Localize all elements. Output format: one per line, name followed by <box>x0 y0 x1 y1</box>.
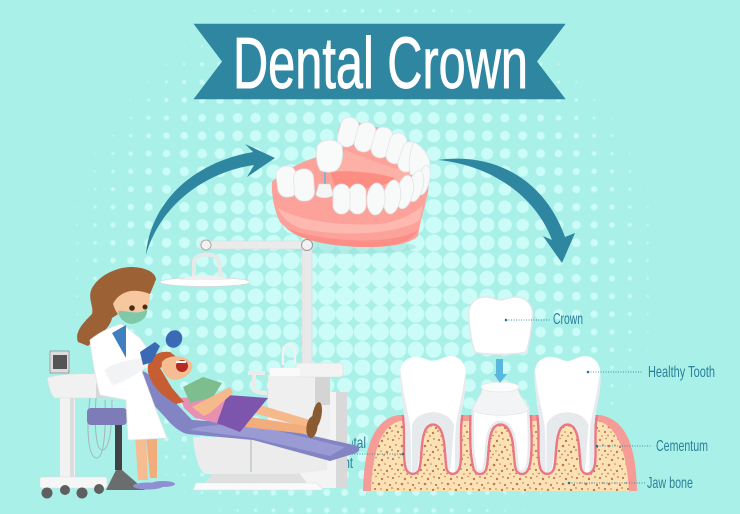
gum bottom shade <box>286 228 418 247</box>
surgical mask <box>118 309 147 324</box>
face <box>162 356 192 380</box>
gum around roots <box>402 415 598 476</box>
label: cementum: Cementum <box>656 438 708 455</box>
scrubs <box>112 325 126 358</box>
blouse <box>180 395 227 423</box>
label: periodontal ligament (partly behind chair): ligament <box>311 455 353 472</box>
front teeth <box>333 164 432 216</box>
faucet <box>283 344 295 365</box>
prepared middle tooth <box>471 382 530 473</box>
hair <box>148 352 184 404</box>
chair base <box>193 437 327 474</box>
gum base <box>272 122 429 247</box>
wheels <box>42 484 104 498</box>
tray table <box>40 351 116 498</box>
label: jaw bone: Jaw bone <box>647 475 693 492</box>
legs <box>250 403 310 428</box>
label: periodontal ligament (partly behind chair) <box>347 436 366 468</box>
cabinet <box>300 392 347 488</box>
skirt <box>217 395 268 432</box>
lamp <box>194 254 221 280</box>
monitor <box>50 351 69 373</box>
label: crown: Crown <box>553 311 583 328</box>
lower gum highlight <box>278 205 423 234</box>
stump and small crown <box>316 140 343 198</box>
gloves <box>140 327 185 365</box>
legs <box>135 435 148 480</box>
gum <box>363 415 637 491</box>
eyes <box>129 304 148 311</box>
shoes <box>133 481 175 490</box>
shoes <box>305 401 324 439</box>
mouth <box>176 360 188 372</box>
tooth diagram <box>363 297 637 491</box>
left molars <box>275 165 315 202</box>
hoses <box>88 398 112 458</box>
patient in chair <box>132 352 359 461</box>
arrow: patient to jaw <box>146 144 275 255</box>
title: Dental Crown <box>233 24 528 104</box>
green bib <box>183 377 222 403</box>
labels and leader lines <box>345 311 715 492</box>
base <box>40 477 107 488</box>
right healthy tooth <box>534 356 601 476</box>
lamp arm <box>302 245 312 367</box>
jaw bone <box>371 421 629 491</box>
placement arrow <box>494 359 507 383</box>
left healthy tooth <box>400 356 466 476</box>
chair <box>132 371 359 461</box>
sleeve <box>104 358 148 385</box>
stool <box>87 408 145 490</box>
back teeth <box>335 115 430 176</box>
label: periodontal ligament (partly behind chair): Periodontal <box>306 435 366 452</box>
table top <box>47 374 113 398</box>
arrow: jaw to tooth diagram <box>438 159 575 263</box>
jaw model <box>272 115 432 254</box>
post <box>60 397 75 477</box>
dental unit and lamp <box>160 240 347 490</box>
coat <box>90 324 167 440</box>
hair <box>77 267 156 346</box>
face <box>112 289 150 323</box>
inner floor <box>335 150 412 187</box>
dentist <box>77 267 185 490</box>
title banner <box>194 24 566 104</box>
arm <box>192 387 233 416</box>
loose crown <box>469 297 532 354</box>
